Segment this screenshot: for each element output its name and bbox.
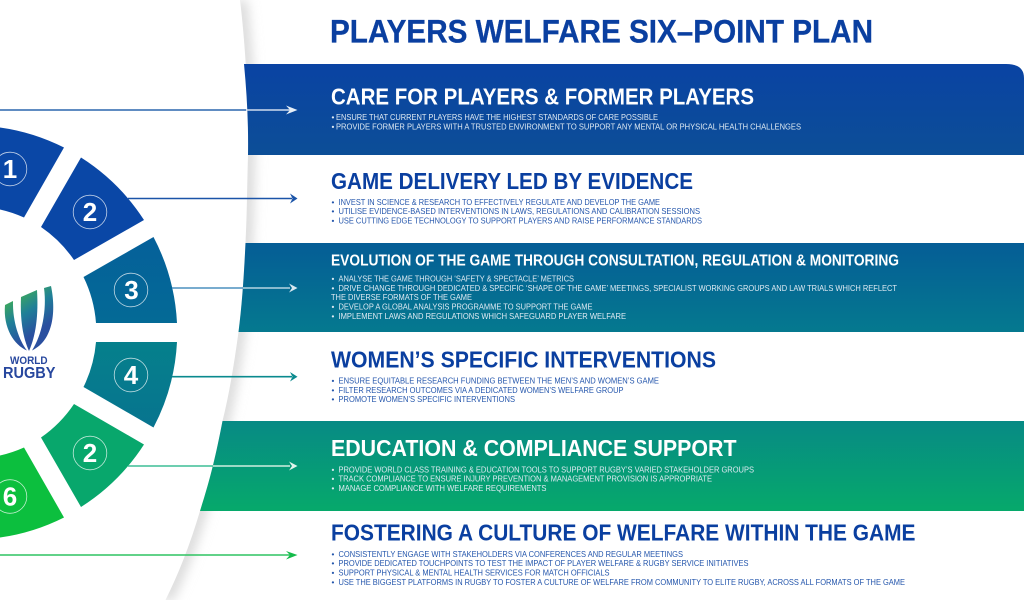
heading: GAME DELIVERY LED BY EVIDENCE <box>331 168 693 194</box>
bullet list: PROVIDE FORMER PLAYERS WITH A TRUSTED ENVIRONMENT TO SUPPORT ANY MENTAL OR PHYSICAL HEALTH CHALLENGES <box>336 122 801 132</box>
bullet list: MANAGE COMPLIANCE WITH WELFARE REQUIREMENTS <box>338 484 547 493</box>
bullet list <box>332 550 905 587</box>
bullet list: PROVIDE DEDICATED TOUCHPOINTS TO TEST THE IMPACT OF PLAYER WELFARE & RUGBY SERVICE INITIATIVES <box>338 559 749 568</box>
heading: EDUCATION & COMPLIANCE SUPPORT <box>331 435 736 461</box>
bullet list: IMPLEMENT LAWS AND REGULATIONS WHICH SAFEGUARD PLAYER WELFARE <box>338 312 626 321</box>
arrow 5 <box>128 462 298 470</box>
bullet list: ENSURE THAT CURRENT PLAYERS HAVE THE HIGHEST STANDARDS OF CARE POSSIBLE <box>336 113 658 122</box>
segment 6 <box>0 448 64 540</box>
bullet list: FILTER RESEARCH OUTCOMES VIA A DEDICATED WOMEN’S WELFARE GROUP <box>338 386 624 395</box>
segment 6: 6 <box>3 482 17 512</box>
bullet list: TRACK COMPLIANCE TO ENSURE INJURY PREVENTION & MANAGEMENT PROVISION IS APPROPRIATE <box>338 474 712 484</box>
bullet list: • <box>332 207 334 216</box>
bullet list: • <box>332 376 334 386</box>
bullet list: • <box>332 550 334 559</box>
heading: EVOLUTION OF THE GAME THROUGH CONSULTATION, REGULATION & MONITORING <box>331 252 899 270</box>
segment 2 <box>41 158 144 260</box>
band: care for players <box>244 64 1024 155</box>
bullet list <box>332 376 659 404</box>
bullet list: • <box>332 216 334 226</box>
bullet list: DEVELOP A GLOBAL ANALYSIS PROGRAMME TO SUPPORT THE GAME <box>338 302 593 312</box>
bullet list: • <box>332 302 334 312</box>
panel: game delivery led by evidence <box>331 168 702 226</box>
heading: WOMEN’S SPECIFIC INTERVENTIONS <box>331 346 716 372</box>
panel: evolution of the game <box>331 252 899 321</box>
arrow 1 <box>0 106 298 114</box>
segment 1 <box>0 125 64 218</box>
segment 3: 3 <box>124 275 139 305</box>
bullet list <box>332 466 754 493</box>
segment 1: 1 <box>3 154 17 184</box>
bullet list: SUPPORT PHYSICAL & MENTAL HEALTH SERVICES FOR MATCH OFFICIALS <box>338 568 610 578</box>
bullet list: • <box>332 274 334 284</box>
band: education and compliance <box>200 421 1024 511</box>
arrow 3 <box>172 284 298 292</box>
bullet list: USE THE BIGGEST PLATFORMS IN RUGBY TO FOSTER A CULTURE OF WELFARE FROM COMMUNITY TO ELITE RUGBY, ACROSS ALL FORMATS OF THE GAME <box>338 578 905 587</box>
segment 3 <box>84 237 177 323</box>
segment 5: 2 <box>83 438 97 468</box>
bullet list: • <box>332 559 334 568</box>
heading: FOSTERING A CULTURE OF WELFARE WITHIN THE GAME <box>331 520 916 546</box>
arrow 6 <box>0 551 298 560</box>
panel: education and compliance support <box>331 435 754 493</box>
icon: rugby posts shield <box>5 286 53 351</box>
panel: fostering a culture of welfare <box>331 520 916 587</box>
bullet list: ENSURE EQUITABLE RESEARCH FUNDING BETWEEN THE MEN’S AND WOMEN’S GAME <box>338 376 659 386</box>
bullet list: PROVIDE WORLD CLASS TRAINING & EDUCATION TOOLS TO SUPPORT RUGBY’S VARIED STAKEHOLDER GROUPS <box>338 466 754 474</box>
bullet list: ANALYSE THE GAME THROUGH ‘SAFETY & SPECTACLE’ METRICS <box>338 274 574 284</box>
bullet list: • <box>332 568 334 578</box>
panel: women's specific interventions <box>331 346 716 404</box>
bullet list: • <box>332 284 334 293</box>
bullet list: • <box>332 386 334 395</box>
segment 2: 2 <box>83 197 97 227</box>
bullet list: • <box>332 113 334 122</box>
bullet list: THE DIVERSE FORMATS OF THE GAME <box>331 293 472 302</box>
bullet list: • <box>332 312 334 321</box>
curved panel shadow <box>166 0 248 600</box>
bullet list: PROMOTE WOMEN’S SPECIFIC INTERVENTIONS <box>338 395 515 404</box>
bullet list: DRIVE CHANGE THROUGH DEDICATED & SPECIFIC ‘SHAPE OF THE GAME’ MEETINGS, SPECIALIST WORKING GROUPS AND LAW TRIALS WHICH REFLECT <box>338 284 897 293</box>
logo: world rugby: RUGBY <box>3 365 56 382</box>
bullet list: • <box>332 122 334 132</box>
bullet list: • <box>332 484 334 493</box>
heading: CARE FOR PLAYERS & FORMER PLAYERS <box>331 84 754 110</box>
bullet list: • <box>332 474 334 484</box>
arrow 4 <box>172 372 298 382</box>
bullet list: INVEST IN SCIENCE & RESEARCH TO EFFECTIVELY REGULATE AND DEVELOP THE GAME <box>338 198 660 207</box>
bullet list <box>332 113 801 132</box>
arrow 2 <box>128 194 298 204</box>
bullet list: • <box>332 198 334 207</box>
bullet list: • <box>332 578 334 587</box>
title: PLAYERS WELFARE SIX–POINT PLAN <box>330 14 873 50</box>
bullet list <box>331 274 897 321</box>
segment 4: 4 <box>124 360 139 390</box>
bullet list: UTILISE EVIDENCE-BASED INTERVENTIONS IN LAWS, REGULATIONS AND CALIBRATION SESSIONS <box>338 207 700 216</box>
segment 5 <box>41 404 144 507</box>
bullet list: CONSISTENTLY ENGAGE WITH STAKEHOLDERS VIA CONFERENCES AND REGULAR MEETINGS <box>338 550 683 559</box>
wordmark: WORLD <box>10 355 48 367</box>
bullet list: USE CUTTING EDGE TECHNOLOGY TO SUPPORT PLAYERS AND RAISE PERFORMANCE STANDARDS <box>338 216 702 226</box>
bullet list: • <box>332 395 334 404</box>
logo: world rugby <box>3 286 56 382</box>
panel: care for players and former players <box>331 84 801 132</box>
bullet list <box>332 198 702 226</box>
band: evolution of the game <box>238 243 1024 332</box>
bullet list: • <box>332 466 334 474</box>
segment 4 <box>84 342 177 428</box>
